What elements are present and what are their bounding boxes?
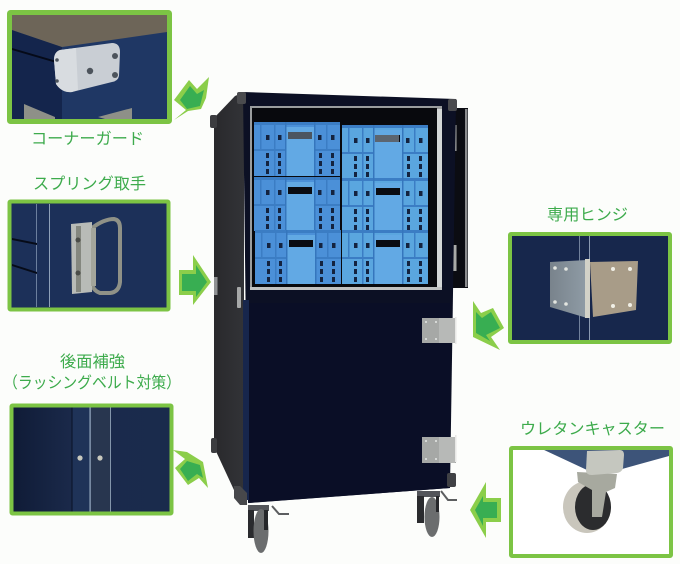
side handle [214, 277, 218, 295]
heading: spring handle: スプリング取手 [33, 175, 146, 193]
icon: corner guard bracket [54, 43, 120, 92]
sub-heading: lashing belt note: （ラッシングベルト対策） [3, 374, 181, 392]
cabinet front body [243, 92, 456, 503]
heading: corner guard: コーナーガード [31, 130, 144, 148]
panel: corner guard [10, 12, 170, 122]
side corner guard [210, 115, 217, 128]
icon: right knob [97, 455, 103, 461]
upper hinge [422, 317, 456, 344]
arrow: urethane caster [470, 482, 501, 538]
front edge latch [237, 287, 241, 308]
right caster [417, 491, 457, 537]
cabinet: insulated cart [210, 92, 468, 553]
bottom-left corner guard [234, 486, 247, 505]
icon: left knob [77, 455, 83, 461]
left side face [214, 92, 244, 503]
lower side corner guard [211, 438, 217, 453]
top-right corner guard [448, 99, 457, 111]
upper compartment frame [250, 106, 442, 290]
bottom-right corner guard [447, 473, 456, 487]
panel: rear reinforcement [11, 405, 172, 514]
icon: handle ring [92, 219, 120, 293]
open upper door [446, 108, 468, 288]
arrow: corner guard [174, 77, 209, 120]
arrow: spring handle [179, 255, 211, 305]
icon: hinge [550, 259, 638, 318]
arrow: rear reinforcement [173, 450, 208, 488]
heading: dedicated hinge: 専用ヒンジ [547, 206, 628, 224]
arrow: dedicated hinge [473, 301, 504, 350]
lower door [249, 303, 450, 503]
icon: corner bracket [586, 450, 624, 475]
panel: dedicated hinge [510, 234, 670, 342]
icon: caster wheel [563, 472, 617, 533]
plastic crates [254, 122, 428, 284]
icon: handle plate [71, 222, 96, 294]
panel: urethane caster [511, 448, 671, 556]
top-left corner guard [237, 92, 246, 104]
left caster [248, 505, 289, 553]
front left edge strip [243, 300, 249, 500]
heading: rear reinforcement: 後面補強 [60, 353, 125, 371]
panel: spring handle [10, 201, 169, 310]
lower hinge [422, 435, 456, 463]
heading: urethane caster: ウレタンキャスター [520, 420, 665, 438]
